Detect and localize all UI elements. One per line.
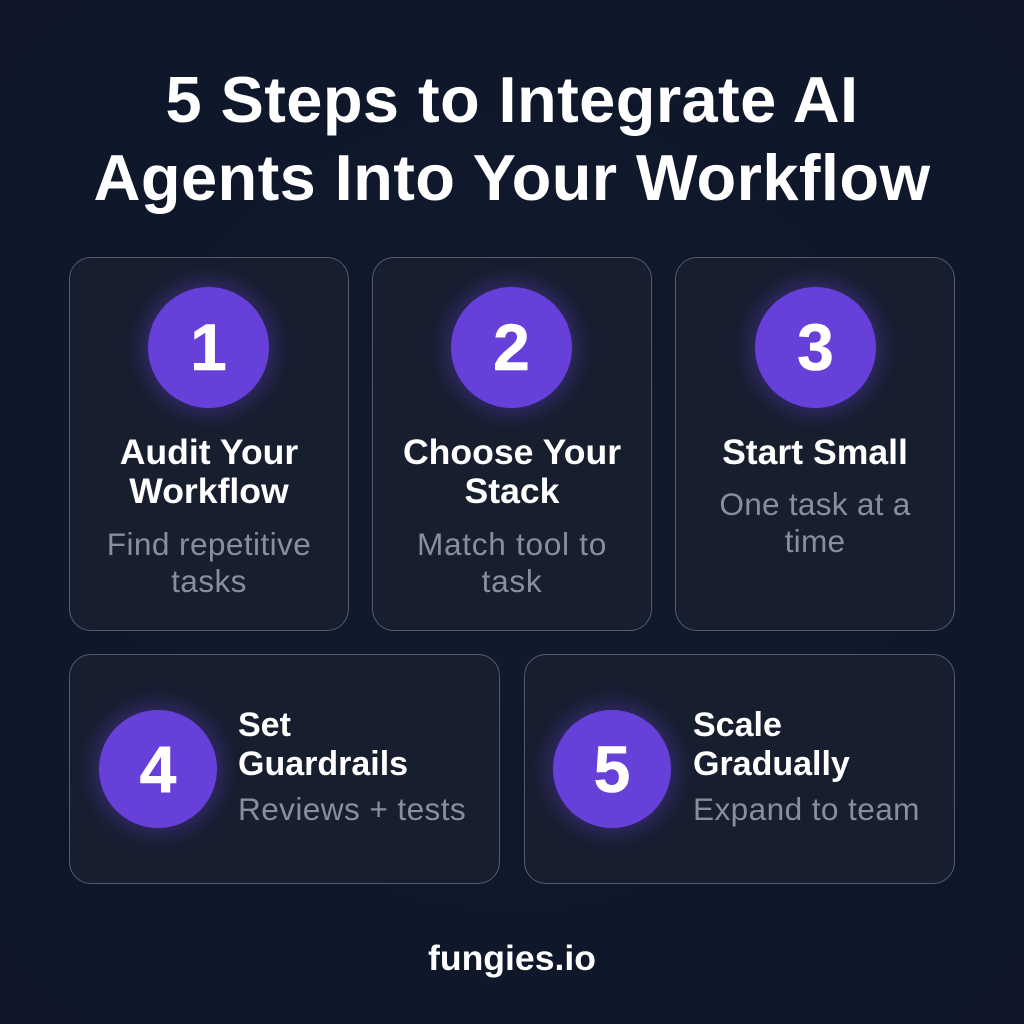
heading: step 5: [693, 706, 850, 783]
icon: number 4: [99, 710, 217, 828]
text: step 5: Expand to team: [693, 791, 920, 827]
icon: number 5: [553, 710, 671, 828]
icon: number 5: 5: [594, 732, 630, 806]
text: step 2: [417, 526, 607, 599]
icon: number 3: 3: [797, 310, 834, 384]
title: [94, 63, 930, 214]
text: step 3: time: [785, 523, 845, 559]
heading: step 2: [403, 432, 621, 511]
text: step 3: One task at a: [719, 486, 911, 522]
icon: number 2: 2: [493, 310, 530, 384]
heading: step 1: Audit Your: [120, 432, 298, 472]
text: step 2: Match tool to: [417, 526, 607, 562]
heading: step 1: [120, 432, 298, 511]
title: 5 Steps to Integrate AI: [165, 63, 859, 136]
text: step 4: Reviews + tests: [238, 791, 466, 827]
heading: step 2: Choose Your: [403, 432, 621, 472]
heading: step 4: Guardrails: [238, 745, 408, 783]
heading: step 2: Stack: [465, 471, 559, 511]
panel: step 5: [524, 654, 955, 884]
heading: step 3: Start Small: [722, 432, 908, 472]
heading: step 5: Gradually: [693, 745, 850, 783]
footer brand: fungies.io: [428, 938, 596, 978]
text: step 1: Find repetitive: [107, 526, 311, 562]
text: step 1: tasks: [171, 563, 247, 599]
heading: step 1: Workflow: [129, 471, 289, 511]
text: step 1: [107, 526, 311, 599]
icon: number 1: 1: [190, 310, 227, 384]
icon: number 2: [451, 287, 572, 408]
icon: number 1: [148, 287, 269, 408]
icon: number 3: [755, 287, 876, 408]
heading: step 4: [238, 706, 408, 783]
panel: step 4: [69, 654, 500, 884]
icon: number 4: 4: [140, 732, 176, 806]
heading: step 5: Scale: [693, 706, 782, 744]
panel: step 2: [372, 257, 652, 631]
text: step 3: [719, 486, 911, 559]
panel: step 1: [69, 257, 349, 631]
title: Agents Into Your Workflow: [94, 141, 930, 214]
heading: step 4: Set: [238, 706, 291, 744]
panel: step 3: [675, 257, 955, 631]
text: step 2: task: [482, 563, 542, 599]
